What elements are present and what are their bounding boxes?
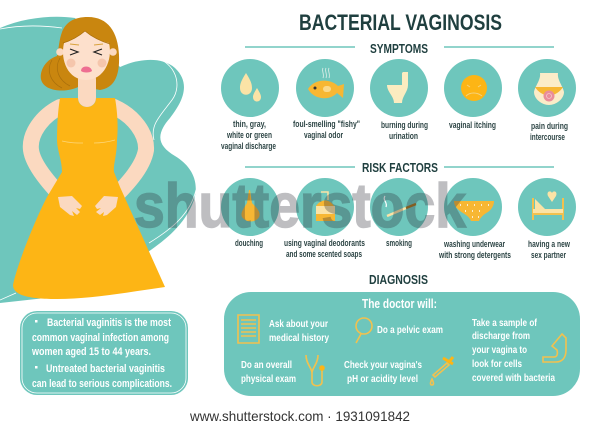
panel: diagnosis: your vagina to (472, 344, 527, 356)
icon: stethoscope (306, 355, 325, 386)
icon: document (238, 315, 259, 343)
eyes (70, 49, 102, 55)
arms (31, 107, 146, 203)
panel: diagnosis: physical exam (241, 373, 296, 385)
symptom labels: white or green (226, 130, 272, 141)
icon: douche bulb (241, 190, 260, 222)
footer credit: www.shutterstock.com · 1931091842 (189, 408, 410, 424)
symptom labels: vaginal discharge (221, 141, 276, 152)
heading: risk factors: RISK FACTORS (362, 160, 438, 175)
icon: sad face (461, 75, 487, 101)
symptom labels: thin, gray, (233, 119, 266, 130)
panel: diagnosis: The doctor will: (362, 297, 437, 311)
note box: Untreated bacterial vaginitis (46, 363, 165, 375)
symptom labels: foul-smelling "fishy" (293, 119, 360, 130)
note box: common vaginal infection among (32, 332, 169, 344)
heading: symptoms: SYMPTOMS (370, 41, 428, 56)
panel: diagnosis: covered with bacteria (472, 372, 555, 384)
hands (58, 196, 118, 216)
panel: diagnosis: Do a pelvic exam (377, 324, 443, 336)
symptom labels: vaginal odor (304, 130, 343, 141)
note box: women aged 15 to 44 years. (31, 346, 151, 358)
symptom labels: intercourse (530, 132, 565, 143)
mouth (81, 66, 92, 72)
risk factor labels: douching (235, 238, 263, 249)
symptom labels: urination (389, 131, 418, 142)
panel: diagnosis: Take a sample of (472, 317, 537, 329)
icon: microscope (543, 334, 566, 362)
icon: bed with heart (533, 191, 563, 220)
hair back (41, 17, 119, 91)
icon: fish (308, 68, 344, 98)
symptom labels: vaginal itching (449, 120, 496, 131)
icon: dropper (430, 357, 453, 385)
icon: underwear (454, 201, 494, 221)
risk factor labels: washing underwear (443, 239, 505, 250)
background teal blob (0, 17, 196, 303)
icon: soap and deodorant (316, 192, 335, 221)
panel: diagnosis: medical history (269, 332, 329, 344)
symptom icons row (221, 59, 576, 117)
risk factor labels: having a new (528, 239, 570, 250)
panel: diagnosis: look for cells (472, 358, 522, 370)
note box: Bacterial vaginitis is the most (47, 317, 171, 329)
panel: diagnosis: Ask about your (269, 318, 328, 330)
dress (13, 98, 165, 299)
ears and face (56, 48, 64, 56)
risk factor labels (235, 238, 570, 261)
risk factor labels: using vaginal deodorants (284, 238, 365, 249)
risk factor labels: and some scented soaps (286, 249, 362, 260)
icon: toilet (387, 72, 408, 103)
panel: diagnosis: Do an overall (241, 359, 292, 371)
symptom labels: pain during (531, 121, 568, 132)
icon: drops (240, 73, 261, 102)
panel: diagnosis: Check your vagina's (344, 359, 422, 371)
note box: can lead to serious complications. (32, 378, 172, 390)
title: BACTERIAL VAGINOSIS (299, 10, 502, 35)
panel: diagnosis (224, 292, 580, 396)
risk factor icons row (221, 178, 576, 236)
symptom labels: burning during (381, 120, 428, 131)
icon: abdomen (534, 73, 564, 105)
symptom labels (221, 119, 568, 152)
watermark: shutterstock (134, 172, 466, 241)
neck (78, 70, 96, 107)
icon: cigarette (384, 196, 416, 216)
panel: diagnosis: pH or acidity level (347, 373, 418, 385)
risk factor labels: with strong detergents (438, 250, 511, 261)
heading: diagnosis: DIAGNOSIS (369, 272, 428, 287)
risk factor labels: sex partner (531, 250, 566, 261)
icon: magnifier (356, 318, 372, 343)
note box (20, 311, 188, 395)
illustration: woman in yellow dress (13, 17, 165, 299)
panel: diagnosis: discharge from (472, 330, 530, 342)
risk factor labels: smoking (386, 238, 412, 249)
